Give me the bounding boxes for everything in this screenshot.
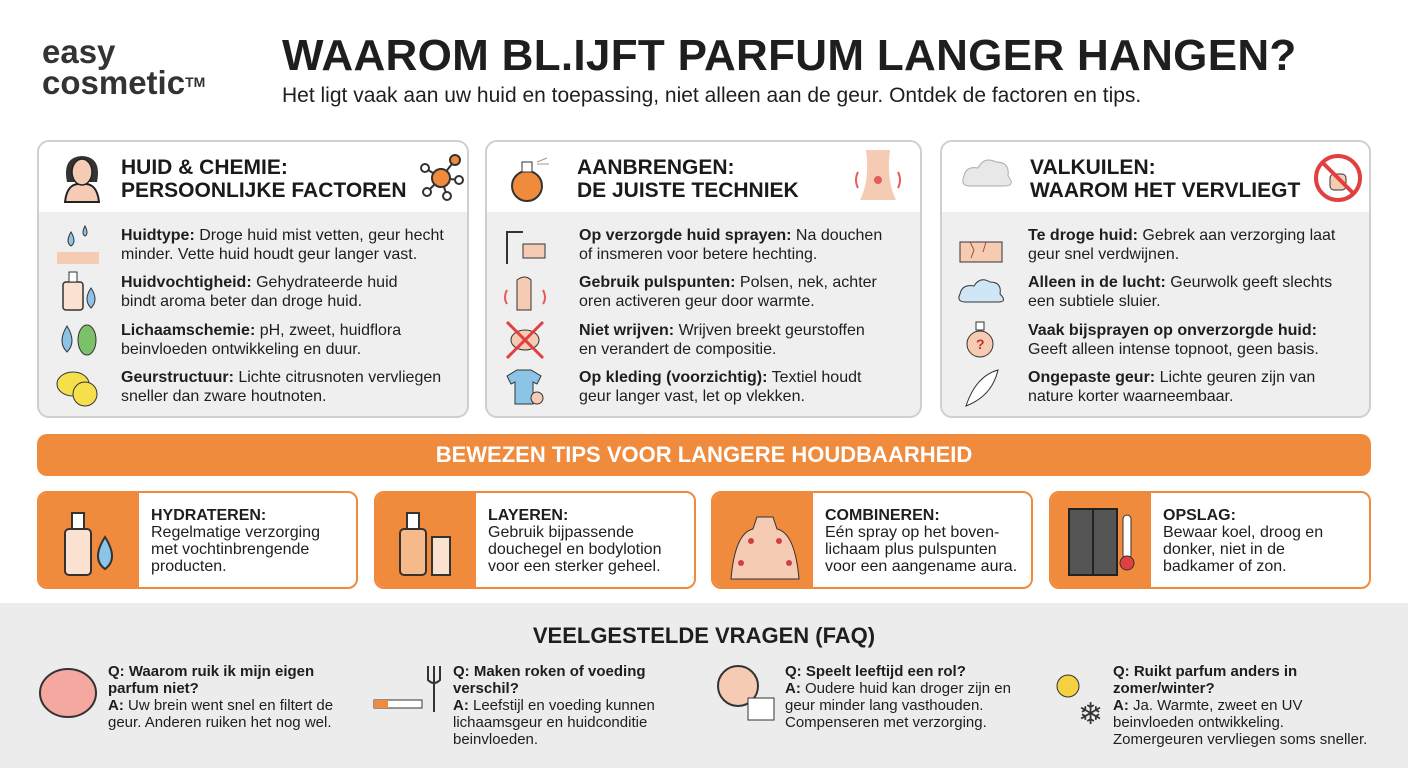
logo — [42, 33, 205, 101]
faq 3 — [785, 663, 1011, 731]
panel: aanbrengen — [485, 140, 922, 418]
item: niet wrijven — [579, 322, 865, 358]
faq 1 — [108, 663, 333, 731]
faq 1: Q: Waarom ruik ik mijn eigen — [108, 663, 314, 680]
icon: neck — [855, 150, 901, 200]
faq 4: A: Ja. Warmte, zweet en UV — [1113, 697, 1302, 714]
faq 4: zomer/winter? — [1113, 680, 1215, 697]
icon: no perfume — [1314, 154, 1362, 202]
tip: combineren: COMBINEREN: — [825, 507, 940, 524]
banner: tips: BEWEZEN TIPS VOOR LANGERE HOUDBAARHEID — [436, 442, 972, 467]
tip: layeren: Gebruik bijpassende — [488, 524, 634, 541]
tip: opslag: Bewaar koel, droog en — [1163, 524, 1323, 541]
faq icon: cigarette fork — [374, 666, 441, 712]
faq 2: lichaamsgeur en huidconditie — [453, 714, 647, 731]
item: kleding: geur langer vast, let op vlekken. — [579, 388, 805, 405]
tip: opslag: OPSLAG: — [1163, 507, 1236, 524]
tip: hydrateren — [37, 491, 358, 589]
item: kleding — [579, 369, 862, 405]
item: pulspunten: oren activeren geur door warmte. — [579, 293, 815, 310]
item: bijsprayen: Vaak bijsprayen op onverzorgde huid: — [1028, 322, 1317, 339]
panel: valkuilen: ? — [976, 336, 985, 352]
subtitle: Het ligt vaak aan uw huid en toepassing, niet alleen aan de geur. Ontdek de factoren en tips. — [282, 84, 1141, 107]
item: te droge huid — [1028, 227, 1336, 263]
item: verzorgde huid: Op verzorgde huid sprayen: Na douchen — [579, 227, 882, 244]
faq 4: Q: Ruikt parfum anders in — [1113, 663, 1297, 680]
faq icon: sun snow — [1056, 674, 1103, 728]
panel: huid & chemie: sneller dan zware houtnoten. — [121, 388, 326, 405]
faq 2: verschil? — [453, 680, 519, 697]
item: ongepaste geur: nature korter waarneembaar. — [1028, 388, 1233, 405]
item: niet wrijven: Niet wrijven: Wrijven breekt geurstoffen — [579, 322, 865, 339]
faq 1: parfum niet? — [108, 680, 199, 697]
panel: huid & chemie: HUID & CHEMIE: — [121, 156, 288, 179]
item: huidtype — [57, 225, 99, 264]
tip: layeren: voor een sterker geheel. — [488, 558, 661, 575]
panel: huid & chemie: minder. Vette huid houdt geur langer vast. — [121, 246, 417, 263]
tip: layeren — [374, 491, 696, 589]
icon: molecule — [420, 154, 464, 201]
panel: aanbrengen: DE JUISTE TECHNIEK — [577, 179, 799, 202]
banner: tips — [37, 434, 1371, 476]
panel: huid & chemie: Huidvochtigheid: Gehydrateerde huid — [121, 274, 398, 291]
panel: huid & chemie: beinvloeden ontwikkeling en duur. — [121, 341, 361, 358]
logo: easy — [42, 33, 115, 70]
item: niet wrijven: en verandert de compositie. — [579, 341, 776, 358]
item: ongepaste geur: Ongepaste geur: Lichte geuren zijn van — [1028, 369, 1315, 386]
tip: opslag — [1049, 491, 1371, 589]
icon: woman — [64, 156, 100, 203]
tip: combineren — [711, 491, 1033, 589]
item: te droge huid: Te droge huid: Gebrek aan verzorging laat — [1028, 227, 1335, 244]
panel: huid & chemie: bindt aroma beter dan droge huid. — [121, 293, 362, 310]
item: lucht: Alleen in de lucht: Geurwolk geeft slechts — [1028, 274, 1332, 291]
title: WAAROM BL.IJFT PARFUM LANGER HANGEN? — [282, 31, 1297, 80]
faq 1: A: Uw brein went snel en filtert de — [108, 697, 333, 714]
panel: valkuilen: VALKUILEN: — [1030, 156, 1156, 179]
item: verzorgde huid — [579, 227, 882, 263]
faq 2: A: Leefstijl en voeding kunnen — [453, 697, 655, 714]
faq 4: beinvloeden ontwikkeling. — [1113, 714, 1284, 731]
item: kleding: Op kleding (voorzichtig): Textiel houdt — [579, 369, 861, 386]
panel: huid & chemie — [37, 140, 469, 418]
faq 3: Compenseren met verzorging. — [785, 714, 987, 731]
faq 2: beinvloeden. — [453, 731, 538, 748]
tip: hydrateren: Regelmatige verzorging — [151, 524, 320, 541]
faq 1: geur. Anderen ruiken het nog wel. — [108, 714, 332, 731]
faq 2 — [453, 663, 655, 748]
item: te droge huid: geur snel verdwijnen. — [1028, 246, 1179, 263]
faq 4: Zomergeuren vervliegen soms sneller. — [1113, 731, 1367, 748]
item: lucht — [1028, 274, 1332, 310]
panel: huid & chemie: Lichaamschemie: pH, zweet, huidflora — [121, 322, 401, 339]
item: huidvochtigheid — [62, 272, 96, 311]
item: pulspunten — [579, 274, 877, 310]
item: geurstructuur — [56, 372, 98, 406]
panel: huid & chemie: PERSOONLIJKE FACTOREN — [121, 179, 406, 202]
tip: combineren: voor een aangename aura. — [825, 558, 1017, 575]
item: bijsprayen: Geeft alleen intense topnoot, geen basis. — [1028, 341, 1319, 358]
panel: valkuilen: WAAROM HET VERVLIEGT — [1030, 179, 1300, 202]
item: lichaamschemie — [62, 324, 96, 356]
item: verzorgde huid: of insmeren voor betere hechting. — [579, 246, 817, 263]
icon: cloud — [962, 160, 1012, 186]
item: lucht: een subtiele sluier. — [1028, 293, 1161, 310]
item: pulspunten: Gebruik pulspunten: Polsen, nek, achter — [579, 274, 877, 291]
item: ongepaste geur — [1028, 369, 1315, 405]
tip: opslag: badkamer of zon. — [1163, 558, 1287, 575]
panel: valkuilen — [940, 140, 1371, 418]
tip: hydrateren: HYDRATEREN: — [151, 507, 266, 524]
logo: cosmeticTM — [42, 64, 205, 101]
tip: layeren: douchegel en bodylotion — [488, 541, 661, 558]
faq icon: brain — [39, 668, 97, 718]
faq title: VEELGESTELDE VRAGEN (FAQ) — [533, 623, 875, 648]
panel: aanbrengen: AANBRENGEN: — [577, 156, 734, 179]
faq section — [0, 603, 1408, 768]
faq 3: geur minder lang vasthouden. — [785, 697, 983, 714]
tip: combineren: Eén spray op het boven- — [825, 524, 999, 541]
tip: combineren: lichaam plus pulspunten — [825, 541, 997, 558]
panel: huid & chemie: Huidtype: Droge huid mist vetten, geur hecht — [121, 227, 444, 244]
faq 4 — [1113, 663, 1367, 748]
tip: hydrateren: producten. — [151, 558, 227, 575]
faq 3: Q: Speelt leeftijd een rol? — [785, 663, 966, 680]
tip: opslag: donker, niet in de — [1163, 541, 1285, 558]
tip: layeren: LAYEREN: — [488, 507, 568, 524]
faq 2: Q: Maken roken of voeding — [453, 663, 646, 680]
panel: huid & chemie: Geurstructuur: Lichte citrusnoten vervliegen — [121, 369, 441, 386]
item: bijsprayen — [1028, 322, 1319, 358]
tip: hydrateren: met vochtinbrengende — [151, 541, 309, 558]
icon: perfume bottle — [511, 158, 549, 202]
faq 3: A: Oudere huid kan droger zijn en — [785, 680, 1011, 697]
faq icon: elderly — [717, 665, 774, 720]
